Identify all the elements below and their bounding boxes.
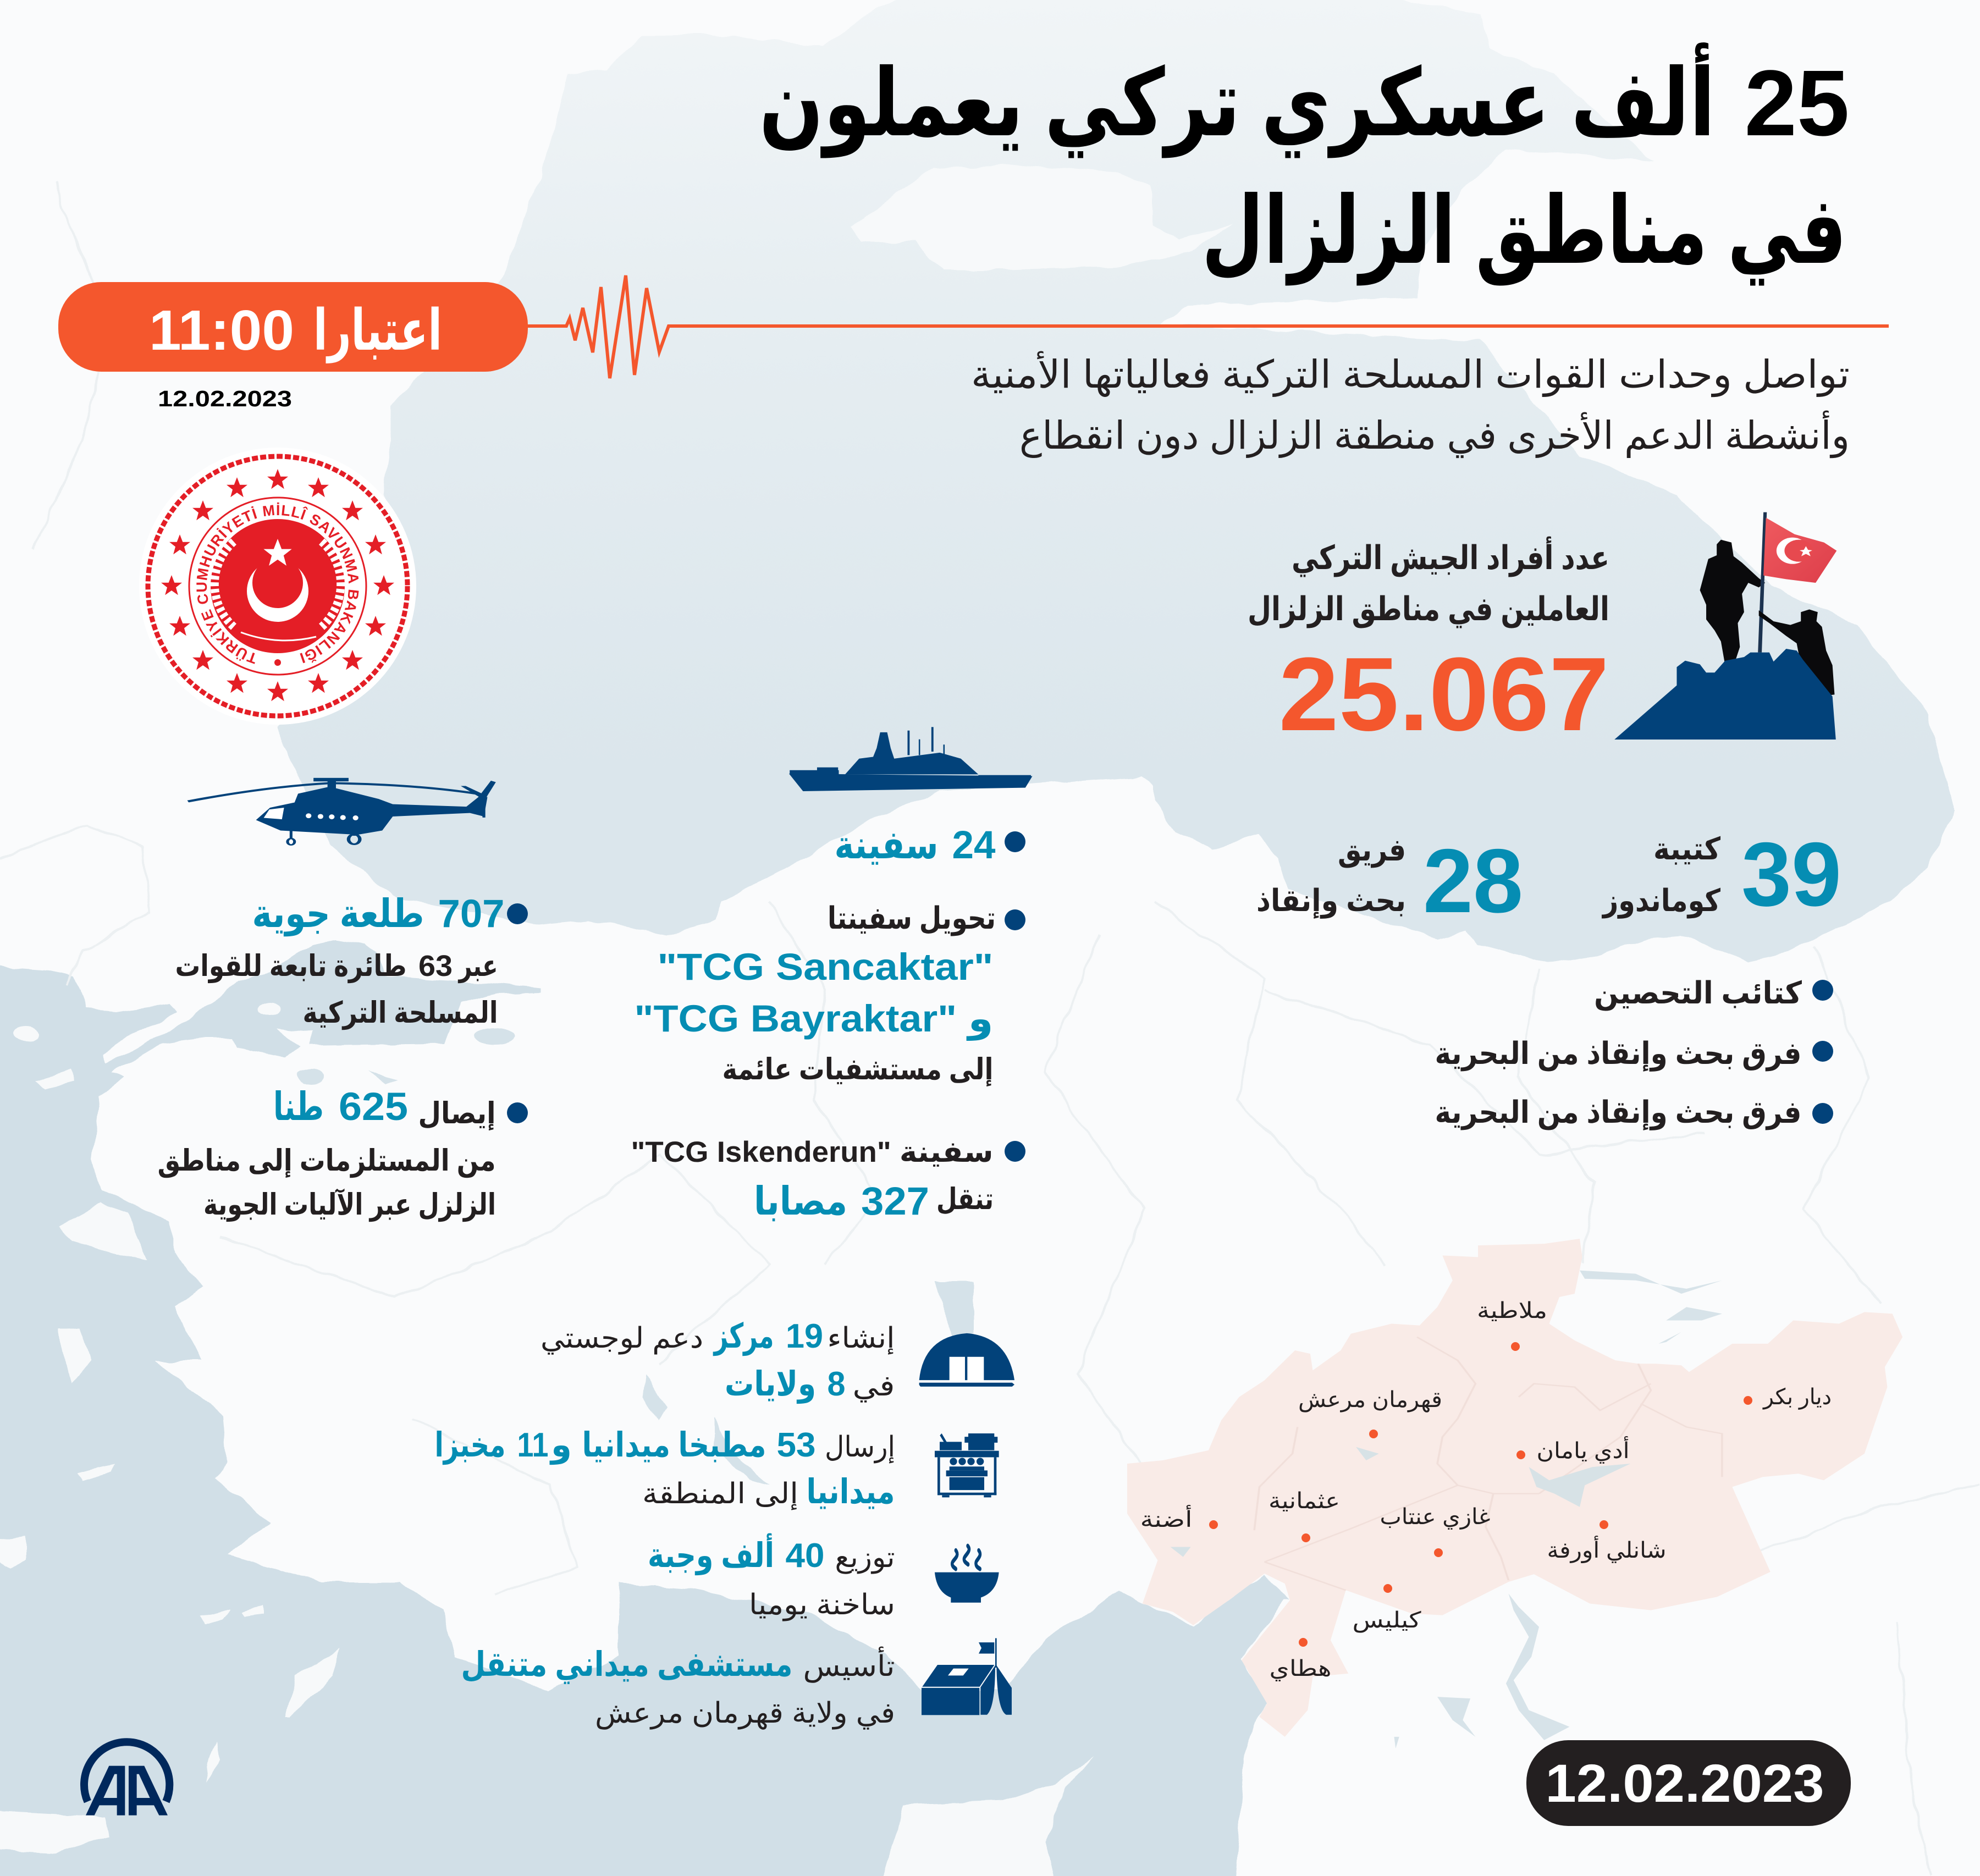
logo: Turkish Ministry of National Defence: TÜRKİYE CUMHURİYETİ MİLLÎ SAVUNMA BAKANLIĞI [196,503,359,664]
text: 707 sorties: 63 [418,950,453,983]
bullet: sorties [507,903,528,924]
row: field hospital: مستشفى ميداني متنقل [461,1646,793,1684]
city: Diyarbakir: ديار بكر [1762,1385,1832,1410]
stat: 39 commando battalions: 39 [1741,824,1841,925]
city: Malatya [1477,1299,1547,1351]
label: personnel: عدد أفراد الجيش التركي [1292,536,1609,577]
row: logistics centres: إنشاء [827,1322,895,1355]
row: logistics centres: مركز [713,1317,774,1356]
text: TCG Iskenderun carries wounded: سفينة "TCG Iskenderun" [631,1136,993,1168]
icon: soup bowl [935,1546,999,1603]
seismograph line [525,275,1889,378]
sea: Black Sea [279,0,1955,963]
row: field kitchens: مخبزا [434,1426,506,1465]
text: TCG Iskenderun carries wounded: تنقل [936,1183,994,1216]
text: 625 tons: من المستلزمات إلى مناطق [157,1144,496,1178]
date badge [1526,1740,1851,1826]
text: ships converted to hospitals: إلى مستشفيات عائمة [722,1053,993,1086]
text: TCG Iskenderun carries wounded [631,1136,994,1223]
bullet: Iskenderun [1005,1141,1025,1162]
row: logistics centres: 8 [827,1365,846,1403]
text: ships converted to hospitals: "TCG Sancaktar" [658,946,993,988]
city: Adiyaman [1516,1436,1630,1464]
city: Kilis: كيليس [1353,1608,1422,1632]
stat: 39 commando battalions [1601,824,1841,925]
bullet: ships [1005,831,1025,852]
text: ships converted to hospitals: و "TCG Bayraktar" [635,997,993,1041]
time badge: 11:00 [149,299,294,362]
row: field kitchens: مطبخا ميدانيا [582,1426,766,1464]
panel: navy facts [631,824,1025,1223]
row: logistics centres: ولايات [725,1365,816,1404]
icon: helicopter [188,778,496,845]
city: Osmaniye: عثمانية [1268,1489,1340,1513]
text: 625 tons: إيصال [418,1097,496,1130]
stat: 24 ships: سفينة [835,824,938,867]
row: field kitchens: إرسال [825,1431,895,1464]
city: Kahramanmaras: قهرمان مرعش [1298,1388,1442,1412]
list: unit types: كتائب التحصين [1594,975,1802,1011]
row: hot meals: توزيع [835,1542,895,1574]
city: Sanliurfa: شانلي أورفة [1547,1536,1666,1563]
list: unit types [1435,975,1833,1130]
text: 707 sorties: طائرة تابعة للقوات [175,950,407,983]
stat: 28 search and rescue teams [1256,830,1523,931]
icon: field hospital tent [922,1638,1012,1715]
text: 625 tons: طنا [273,1085,324,1129]
city: Gaziantep: غازي عنتاب [1380,1505,1490,1530]
city: Kahramanmaras [1298,1388,1442,1438]
city: Gaziantep [1380,1505,1490,1557]
row: field kitchens: إلى المنطقة [642,1478,798,1510]
row: hot meals [648,1533,895,1621]
time badge [58,282,528,372]
text: 625 tons [157,1085,496,1222]
stat: 28 search and rescue teams: فريق [1338,832,1406,868]
panel: total personnel [1248,512,1836,753]
icon: warship [789,727,1033,791]
city: Kilis [1353,1584,1422,1632]
logo: Turkish Ministry of National Defence [145,454,416,725]
stat: 28 search and rescue teams: بحث وإنقاذ [1256,883,1406,919]
label: personnel [1248,536,1609,628]
city: Osmaniye [1268,1489,1340,1542]
row: logistics centres: في [852,1370,895,1403]
title [759,42,1850,286]
text: ships converted to hospitals [635,901,996,1086]
row: field kitchens: 11 [517,1426,549,1464]
panel: unit counts [1256,824,1841,1130]
row: field kitchens [434,1426,895,1511]
label: personnel: العاملين في مناطق الزلزال [1248,591,1609,628]
stat: 28 search and rescue teams: 28 [1423,830,1523,931]
list: unit types: فرق بحث وإنقاذ من البحرية [1435,1095,1801,1130]
number: 25.067: 25.067 [1279,636,1609,753]
text: 707 sorties [175,892,505,1030]
row: field hospital: تأسيس [803,1646,895,1683]
logo: Anadolu Agency [84,1742,169,1816]
city: Adana [1140,1505,1218,1532]
stat: 39 commando battalions: كوماندوز [1601,883,1720,919]
map: city labels and markers [1140,1299,1832,1681]
row: logistics centres: 19 [786,1317,823,1355]
land: Crimea [851,165,1234,270]
text: 625 tons: الزلزل عبر الآليات الجوية [203,1188,496,1222]
date badge: 12.02.2023 [1545,1753,1824,1813]
intro text: تواصل وحدات القوات المسلحة التركية فعالياتها الأمنية [971,351,1850,398]
row: field hospital [461,1646,895,1730]
bullet: supplies [507,1102,528,1123]
row: hot meals: 40 [785,1537,825,1575]
list: unit types: فرق بحث وإنقاذ من البحرية [1435,1036,1801,1072]
land: islands and Cyprus [0,1002,1093,1876]
city: Hatay [1269,1638,1332,1681]
intro text [971,351,1850,459]
title: 25 [1744,51,1850,156]
text: TCG Iskenderun carries wounded: مصابا [754,1180,847,1223]
icon: soldiers raising flag on mountain [1614,512,1836,740]
text: TCG Iskenderun carries wounded: 327 [861,1180,929,1223]
text: 707 sorties: طلعة جوية [252,892,424,936]
city: Malatya: ملاطية [1477,1299,1547,1323]
stat: 24 ships: 24 [952,824,996,867]
text: 625 tons: 625 [339,1085,408,1129]
text: 707 sorties: المسلحة التركية [302,996,498,1030]
row: field hospital: في ولاية قهرمان مرعش [595,1697,895,1730]
row: hot meals: ساخنة يوميا [749,1589,895,1621]
city: Hatay: هطاي [1269,1657,1332,1681]
stat: 39 commando battalions: كتيبة [1653,831,1720,866]
intro text: وأنشطة الدعم الأخرى في منطقة الزلزال دون انقطاع [1019,410,1850,459]
row: field kitchens: ميدانيا [806,1473,895,1511]
city: Sanliurfa [1547,1520,1666,1563]
time badge: اعتبارا [313,299,442,363]
text: 707 sorties: 707 [438,892,505,936]
region: earthquake provinces [1127,1239,1902,1748]
icon: hangar [919,1333,1014,1387]
row: field kitchens: 53 [776,1426,816,1464]
sea: Aegean, Marmara and Mediterranean [0,939,1290,1876]
bullet: conversion [1005,909,1025,930]
city: Adana: أضنة [1140,1505,1192,1532]
row: hot meals: ألف وجبة [648,1533,774,1575]
panel: logistics list [434,1317,1014,1730]
lakes [297,1028,973,1485]
city: Adiyaman: أدي يامان [1536,1436,1630,1464]
title: ألف عسكري تركي يعملون [759,42,1716,158]
badge date: 12.02.2023 [158,386,292,411]
row: field kitchens: و [549,1426,572,1465]
text: 707 sorties: عبر [457,950,498,983]
row: logistics centres [540,1317,895,1404]
panel: air force facts [157,892,528,1222]
row: logistics centres: دعم لوجستي [540,1322,703,1355]
icon: field kitchen [935,1433,999,1497]
text: ships converted to hospitals: تحويل سفينتا [828,901,996,936]
